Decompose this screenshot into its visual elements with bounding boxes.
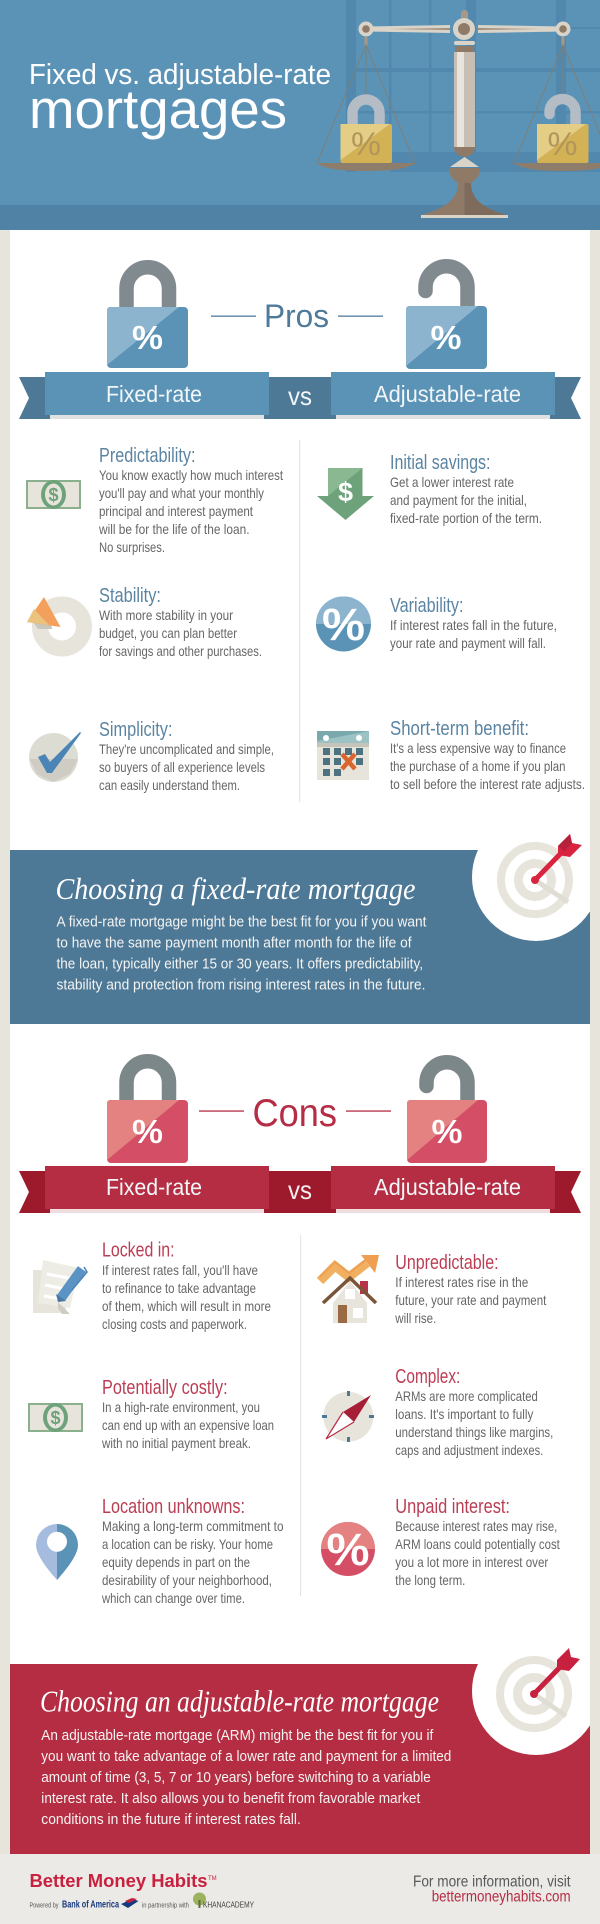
text: Location unknowns: Making a long-term commitment to: [102, 1519, 284, 1534]
icon: compass: [322, 1391, 374, 1442]
icon: target with dart, fixed panel: [472, 834, 590, 941]
icon: dollar bill: $: [48, 485, 59, 505]
text: more information: bettermoneyhabits.com: [432, 1889, 571, 1906]
icon: closed lock, cons: [107, 1061, 188, 1163]
text: Stability: [99, 584, 262, 659]
logo: Better Money Habits: Bank of America: [62, 1900, 119, 1911]
text: Initial savings: Get a lower interest rate: [390, 475, 514, 490]
text: Predictability: principal and interest payment: [99, 504, 253, 519]
panel: choosing an adjustable-rate mortgage: conditions in the future if interest rates fall.: [41, 1812, 301, 1828]
icon: closed lock, pros: [107, 267, 188, 368]
text: Complex: Complex:: [395, 1365, 460, 1388]
heading: Pros: Pros: [264, 298, 329, 334]
text: Locked in: closing costs and paperwork.: [102, 1317, 247, 1332]
icon: dollar bill: [26, 480, 81, 509]
text: Stability: With more stability in your: [99, 608, 233, 623]
logo: Better Money Habits: KHANACADEMY: [203, 1901, 255, 1910]
panel: choosing a fixed-rate mortgage: [10, 850, 590, 1024]
text: Locked in: to refinance to take advantage: [102, 1281, 256, 1296]
text: Potentially costly: [101, 1376, 274, 1451]
text: Unpredictable: will rise.: [394, 1311, 436, 1326]
icon: percent circle red: [321, 1522, 375, 1576]
text: Initial savings: and payment for the initial,: [390, 493, 527, 508]
icon: down arrow with dollar: $: [338, 477, 353, 507]
ribbon: pros fixed vs adjustable: Adjustable-rate: [374, 381, 521, 407]
text: Predictability: [98, 444, 283, 555]
panel: choosing an adjustable-rate mortgage: amount of time (3, 5, 7 or 10 years) before switching to a variable: [41, 1770, 431, 1786]
panel: choosing a fixed-rate mortgage: to have the same payment month after month for the life of: [56, 936, 412, 952]
text: Simplicity: Simplicity:: [99, 718, 172, 741]
icon: percent circle blue: [316, 596, 371, 652]
panel: choosing a fixed-rate mortgage: Choosing a fixed-rate mortgage: [56, 871, 416, 906]
text: Location unknowns: desirability of your neighborhood,: [102, 1573, 272, 1588]
panel: choosing a fixed-rate mortgage: stability and protection from rising interest rates in the future.: [56, 978, 426, 994]
icon: percent circle red: %: [326, 1524, 370, 1575]
title: mortgages: [29, 78, 287, 140]
text: Short-term benefit: It's a less expensive way to finance: [390, 741, 566, 756]
header banner: [0, 0, 600, 230]
text: Initial savings: fixed-rate portion of the term.: [390, 511, 542, 526]
icon: down arrow with dollar: [317, 468, 374, 520]
icon: dollar bill, cons: $: [50, 1408, 61, 1428]
text: more information: For more information, visit: [413, 1874, 571, 1891]
icon: open lock, cons: [407, 1062, 487, 1163]
icon: open lock, cons: %: [432, 1113, 462, 1150]
text: Stability: budget, you can plan better: [99, 626, 237, 641]
text: Predictability: you'll pay and what your monthly: [99, 486, 264, 501]
icon: percent circle blue: %: [322, 599, 365, 650]
text: Predictability: will be for the life of the loan.: [98, 522, 250, 537]
text: Simplicity: so buyers of all experience levels: [99, 760, 265, 775]
icon: balance scale with padlocks: %: [548, 126, 578, 162]
icon: check mark: [29, 732, 81, 782]
ribbon: pros fixed vs adjustable: Fixed-rate: [106, 381, 202, 407]
text: Locked in: [102, 1239, 271, 1332]
text: Location unknowns: which can change over time.: [101, 1591, 245, 1606]
icon: paper and pen: [33, 1260, 87, 1314]
icon: balance scale with padlocks: [316, 10, 600, 218]
panel: choosing an adjustable-rate mortgage: you want to take advantage of a lower rate and payment for a limited: [41, 1749, 451, 1765]
text: Initial savings: [390, 451, 542, 526]
logo: Better Money Habits: Powered by: [30, 1903, 59, 1910]
text: Unpaid interest: the long term.: [395, 1573, 465, 1588]
text: Potentially costly: with no initial payment break.: [101, 1436, 251, 1451]
icon: dollar bill, cons: [28, 1403, 83, 1432]
text: Unpredictable: Unpredictable:: [395, 1251, 499, 1274]
text: Initial savings: Initial savings:: [390, 451, 490, 474]
text: Complex: understand things like margins,: [395, 1425, 553, 1440]
text: Location unknowns: [101, 1495, 284, 1606]
text: Variability: your rate and payment will fall.: [390, 636, 546, 651]
ribbon: pros fixed vs adjustable: vs: [288, 381, 312, 411]
text: Predictability: No surprises.: [99, 540, 165, 555]
text: Locked in: If interest rates fall, you'll have: [102, 1263, 258, 1278]
text: Unpaid interest: [395, 1495, 560, 1588]
ribbon: cons fixed vs adjustable: Fixed-rate: [106, 1174, 202, 1200]
text: Unpredictable: [394, 1251, 546, 1326]
icon: balance scale with padlocks: %: [351, 126, 381, 162]
text: Unpredictable: If interest rates rise in the: [395, 1275, 529, 1290]
title: [29, 59, 331, 140]
panel: choosing an adjustable-rate mortgage: [10, 1664, 590, 1854]
text: Variability: Variability:: [390, 594, 464, 617]
text: Unpaid interest: Unpaid interest:: [395, 1495, 510, 1518]
icon: donut chart: [27, 597, 84, 648]
ribbon: cons fixed vs adjustable: vs: [288, 1175, 312, 1205]
text: Variability: If interest rates fall in the future,: [390, 618, 557, 633]
panel: choosing a fixed-rate mortgage: A fixed-rate mortgage might be the best fit for you if you want: [56, 915, 426, 931]
logo: Better Money Habits: [30, 1871, 255, 1911]
text: Simplicity: can easily understand them.: [99, 778, 240, 793]
icon: target with dart, adjustable panel: [472, 1648, 590, 1755]
text: Potentially costly: In a high-rate environment, you: [102, 1400, 260, 1415]
panel: choosing an adjustable-rate mortgage: Choosing an adjustable-rate mortgage: [40, 1684, 439, 1719]
text: Potentially costly: Potentially costly:: [102, 1376, 228, 1399]
text: Complex: loans. It's important to fully: [395, 1407, 533, 1422]
heading: Cons: Cons: [252, 1092, 337, 1135]
logo: Better Money Habits: in partnership with: [142, 1903, 189, 1910]
title: Fixed vs. adjustable-rate: [29, 59, 331, 91]
panel: choosing an adjustable-rate mortgage: interest rate. It also allows you to benefit from favorable market: [41, 1791, 420, 1807]
icon: open lock, pros: [406, 266, 487, 369]
text: Location unknowns: equity depends in part on the: [102, 1555, 250, 1570]
ribbon: cons fixed vs adjustable: Adjustable-rate: [374, 1174, 521, 1200]
text: Variability: [390, 594, 557, 651]
icon: house with rising arrow: [320, 1255, 379, 1323]
text: Potentially costly: can end up with an expensive loan: [102, 1418, 274, 1433]
icon: open lock, pros: %: [430, 319, 462, 356]
icon: calendar: [317, 731, 369, 780]
text: Location unknowns: Location unknowns:: [102, 1495, 245, 1518]
text: Unpredictable: future, your rate and payment: [395, 1293, 546, 1308]
text: Simplicity: They're uncomplicated and simple,: [99, 742, 274, 757]
panel: choosing an adjustable-rate mortgage: An adjustable-rate mortgage (ARM) might be the best fit for you if: [41, 1728, 434, 1744]
text: Predictability: Predictability:: [99, 444, 196, 467]
text: Complex: caps and adjustment indexes.: [395, 1443, 543, 1458]
icon: closed lock, cons: %: [132, 1113, 163, 1150]
text: Short-term benefit: Short-term benefit:: [390, 717, 529, 740]
text: Unpaid interest: you a lot more in interest over: [395, 1555, 549, 1570]
text: Short-term benefit: [390, 717, 585, 792]
footer: [0, 1854, 600, 1924]
text: Locked in: of them, which will result in more: [102, 1299, 271, 1314]
logo: Better Money Habits: Better Money Habits: [30, 1871, 207, 1891]
text: Locked in: Locked in:: [102, 1239, 174, 1262]
panel: choosing a fixed-rate mortgage: the loan, typically either 15 or 30 years. It offers predictability,: [56, 957, 423, 973]
text: Stability: Stability:: [99, 584, 161, 607]
text: more information: [413, 1874, 571, 1906]
ribbon: pros fixed vs adjustable: [19, 372, 581, 419]
text: Simplicity: [99, 718, 274, 793]
text: Complex: [395, 1365, 553, 1458]
text: Complex: ARMs are more complicated: [395, 1389, 538, 1404]
logo: Better Money Habits: TM: [208, 1876, 217, 1882]
icon: location pin: [36, 1524, 78, 1580]
text: Unpaid interest: Because interest rates may rise,: [395, 1519, 557, 1534]
text: Stability: for savings and other purchases.: [99, 644, 262, 659]
text: Short-term benefit: the purchase of a home if you plan: [390, 759, 566, 774]
text: Predictability: You know exactly how much interest: [99, 468, 283, 483]
ribbon: cons fixed vs adjustable: [19, 1166, 581, 1213]
text: Location unknowns: a location can be risky. Your home: [102, 1537, 273, 1552]
text: Unpaid interest: ARM loans could potentially cost: [395, 1537, 560, 1552]
icon: closed lock, pros: %: [132, 319, 163, 356]
